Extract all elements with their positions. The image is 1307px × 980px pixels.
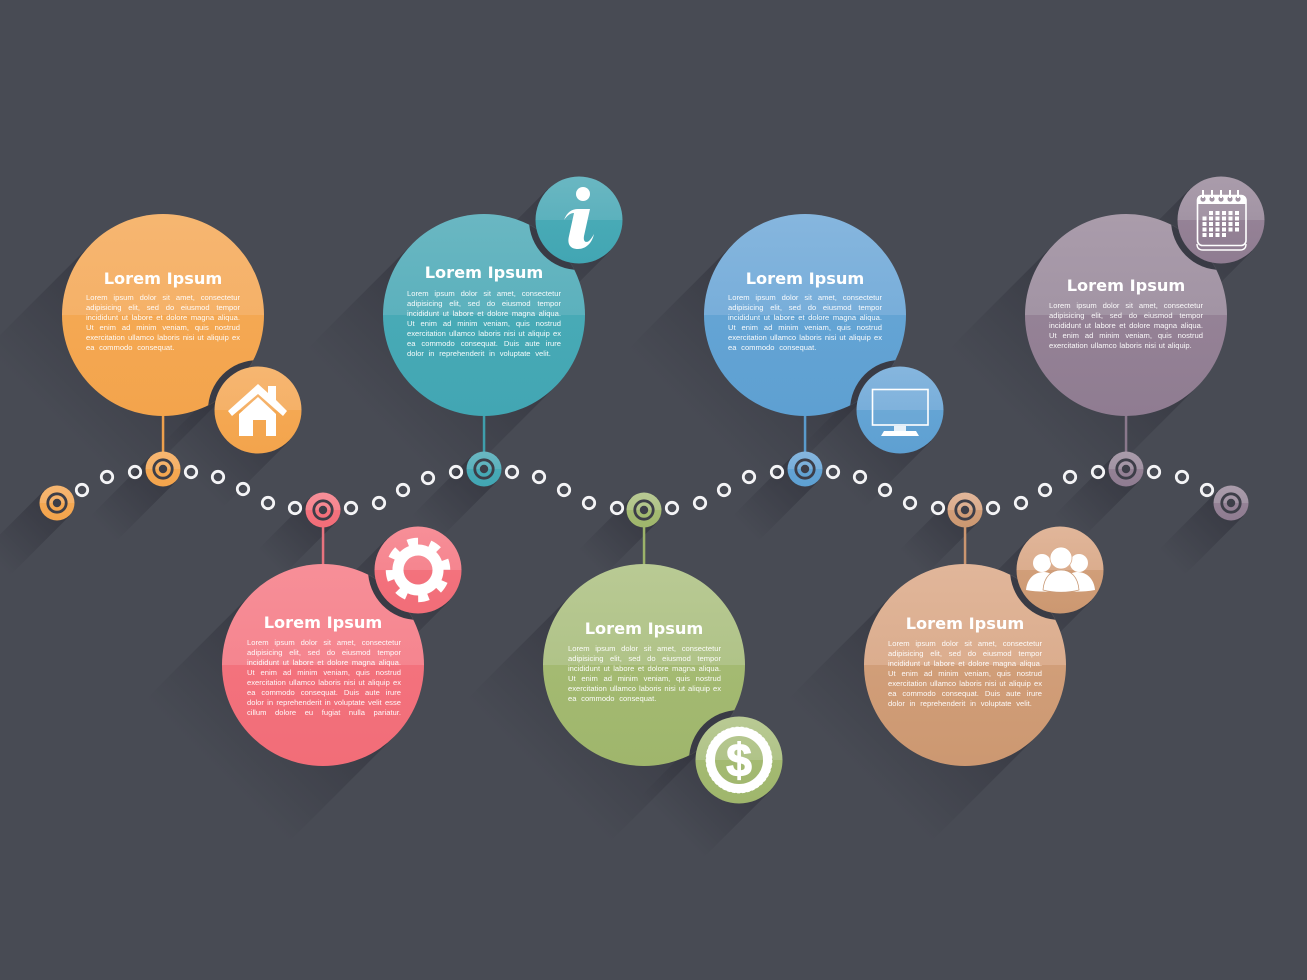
panel: step 3 teal: ea commodo consequat. Duis aute irure	[407, 339, 561, 348]
panel: step 5 blue: exercitation ullamco laboris nisi ut aliquip ex	[728, 333, 882, 342]
panel: step 1 orange: Lorem ipsum dolor sit amet, consectetur	[86, 293, 240, 302]
panel: step 6 tan: adipisicing elit, sed do eiusmod tempor	[888, 649, 1042, 658]
panel: step 1 orange: Ut enim ad minim veniam, quis nostrud	[86, 323, 240, 332]
panel: step 7 purple: Lorem Ipsum	[1067, 276, 1185, 295]
panel: step 1 orange: Lorem Ipsum	[104, 269, 222, 288]
panel: step 2 pink: ea commodo consequat. Duis aute irure	[247, 688, 401, 697]
panel: step 4 green: incididunt ut labore et dolore magna aliqua.	[568, 664, 721, 673]
panel: step 4 green: exercitation ullamco laboris nisi ut aliquip ex	[568, 684, 721, 693]
panel: step 3 teal: adipisicing elit, sed do eiusmod tempor	[407, 299, 561, 308]
panel: step 2 pink: incididunt ut labore et dolore magna aliqua.	[247, 658, 401, 667]
panel: step 7 purple	[1025, 170, 1271, 486]
panel: step 2 pink: Ut enim ad minim veniam, quis nostrud	[247, 668, 401, 677]
icon: house	[228, 384, 287, 436]
end node	[1214, 486, 1248, 520]
panel: step 4 green: Ut enim ad minim veniam, quis nostrud	[568, 674, 721, 683]
panel: step 7 purple: incididunt ut labore et dolore magna aliqua.	[1049, 321, 1203, 330]
panel: step 3 teal: Lorem ipsum dolor sit amet, consectetur	[407, 289, 561, 298]
long shadows	[0, 189, 1252, 858]
panel: step 3 teal: Lorem Ipsum	[425, 263, 543, 282]
panel: step 3 teal: dolor in reprehenderit in voluptate velit.	[407, 349, 551, 358]
panel: step 2 pink: cillum dolore eu fugiat nulla pariatur.	[247, 708, 401, 717]
icon: monitor	[872, 390, 928, 436]
panel: step 2 pink: Lorem Ipsum	[264, 613, 382, 632]
panel: step 2 pink	[222, 492, 468, 766]
dotted timeline path	[76, 466, 1213, 514]
panel: step 3 teal: Ut enim ad minim veniam, quis nostrud	[407, 319, 561, 328]
panel: step 5 blue: Ut enim ad minim veniam, quis nostrud	[728, 323, 882, 332]
panel: step 1 orange: ea commodo consequat.	[86, 343, 174, 352]
start node	[40, 486, 74, 520]
panel: step 1 orange: adipisicing elit, sed do eiusmod tempor	[86, 303, 240, 312]
panel: step 4 green: adipisicing elit, sed do eiusmod tempor	[568, 654, 721, 663]
icon: dollar coin: $	[726, 734, 752, 786]
panel: step 1 orange: incididunt ut labore et dolore magna aliqua.	[86, 313, 240, 322]
icon: calendar	[1197, 190, 1246, 250]
panel: step 5 blue: ea commodo consequat.	[728, 343, 816, 352]
panel: step 5 blue	[704, 214, 950, 486]
panel: step 3 teal	[383, 170, 629, 486]
panel: step 2 pink: exercitation ullamco laboris nisi ut aliquip ex	[247, 678, 401, 687]
panel: step 7 purple: Lorem ipsum dolor sit amet, consectetur	[1049, 301, 1203, 310]
panel: step 4 green: Lorem Ipsum	[585, 619, 703, 638]
panel: step 4 green: Lorem ipsum dolor sit amet, consectetur	[568, 644, 721, 653]
panel: step 2 pink: dolor in reprehenderit in voluptate velit esse	[247, 698, 401, 707]
icon: gear	[385, 537, 451, 603]
panel: step 7 purple: Ut enim ad minim veniam, quis nostrud	[1049, 331, 1203, 340]
panel: step 5 blue: Lorem ipsum dolor sit amet, consectetur	[728, 293, 882, 302]
panel: step 6 tan: dolor in reprehenderit in voluptate velit.	[888, 699, 1032, 708]
panel: step 6 tan: exercitation ullamco laboris nisi ut aliquip ex	[888, 679, 1042, 688]
panel: step 7 purple: exercitation ullamco laboris nisi ut aliquip.	[1049, 341, 1192, 350]
panel: step 6 tan	[864, 492, 1110, 766]
panel: step 4 green: ea commodo consequat.	[568, 694, 656, 703]
panel: step 6 tan: Lorem ipsum dolor sit amet, consectetur	[888, 639, 1042, 648]
panel: step 3 teal: exercitation ullamco laboris nisi ut aliquip ex	[407, 329, 561, 338]
panel: step 2 pink: Lorem ipsum dolor sit amet, consectetur	[247, 638, 401, 647]
panel: step 1 orange: exercitation ullamco laboris nisi ut aliquip ex	[86, 333, 240, 342]
panel: step 5 blue: adipisicing elit, sed do eiusmod tempor	[728, 303, 882, 312]
panel: step 6 tan: incididunt ut labore et dolore magna aliqua.	[888, 659, 1042, 668]
panel: step 6 tan: Lorem Ipsum	[906, 614, 1024, 633]
panel: step 5 blue: incididunt ut labore et dolore magna aliqua.	[728, 313, 882, 322]
panel: step 1 orange	[62, 214, 308, 486]
panel: step 6 tan: ea commodo consequat. Duis aute irure	[888, 689, 1042, 698]
panel: step 2 pink: adipisicing elit, sed do eiusmod tempor	[247, 648, 401, 657]
icon: info	[564, 187, 594, 249]
panel: step 3 teal: incididunt ut labore et dolore magna aliqua.	[407, 309, 561, 318]
icon: people	[1026, 547, 1095, 592]
icon: dollar coin	[706, 727, 772, 793]
panel: step 6 tan: Ut enim ad minim veniam, quis nostrud	[888, 669, 1042, 678]
panel: step 5 blue: Lorem Ipsum	[746, 269, 864, 288]
panel: step 7 purple: adipisicing elit, sed do eiusmod tempor	[1049, 311, 1203, 320]
panel: step 4 green	[543, 492, 789, 810]
